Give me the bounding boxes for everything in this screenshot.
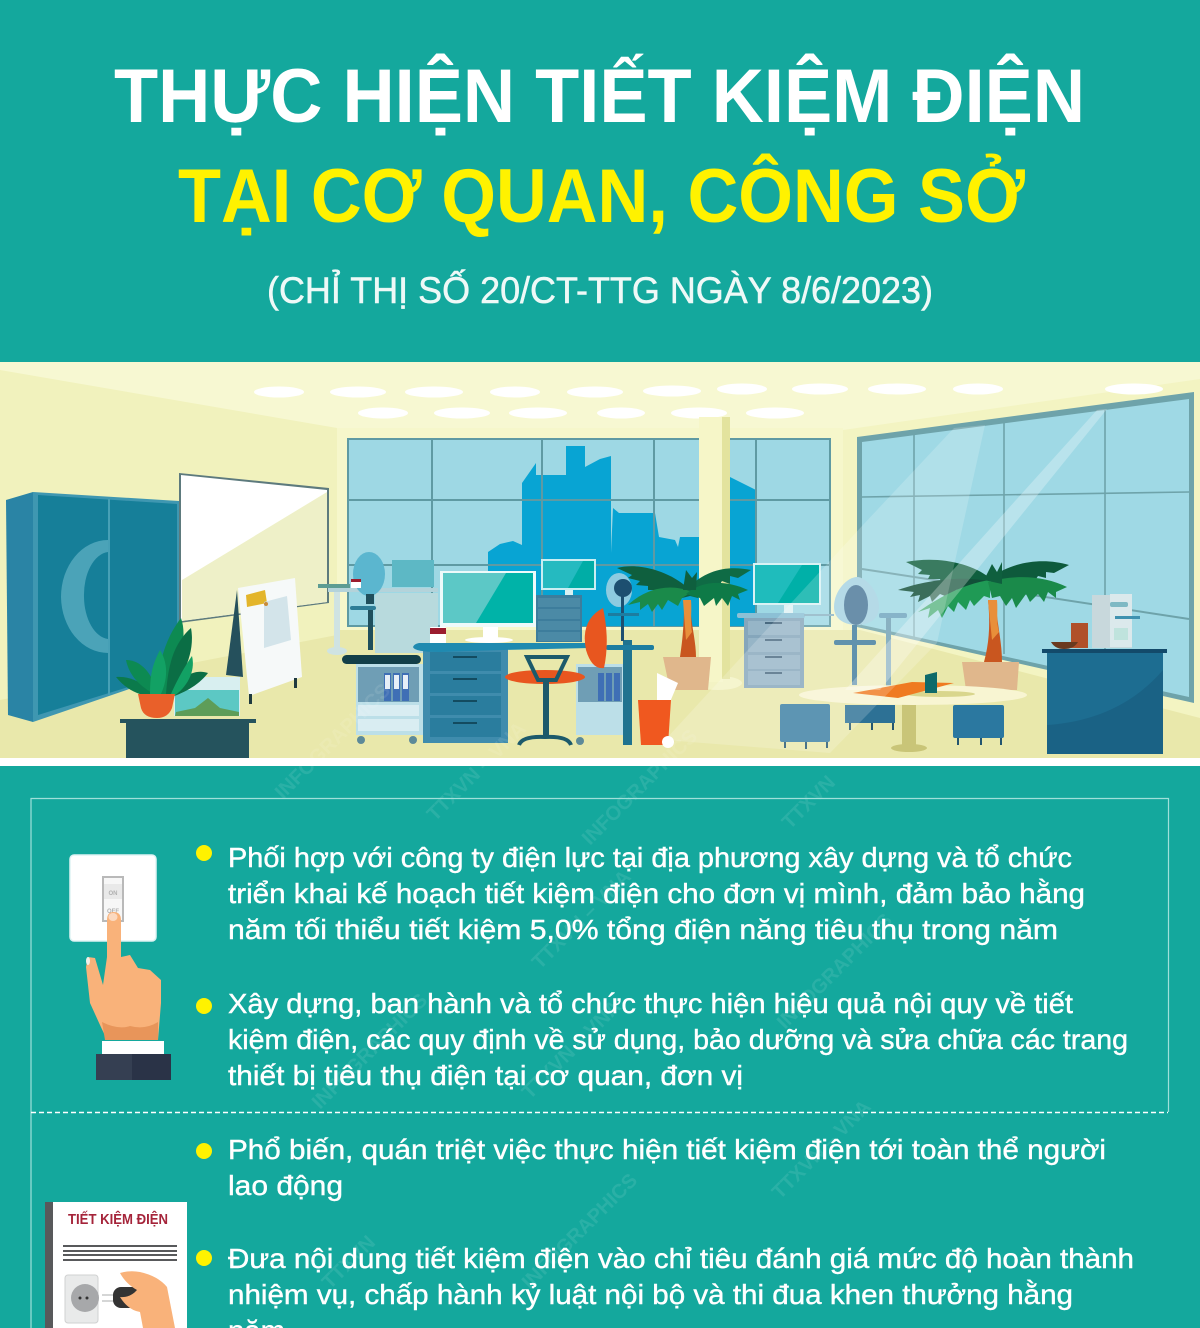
watermarks: INFOGRAPHICS (518, 1170, 642, 1294)
watermarks: INFOGRAPHICS (773, 910, 897, 1034)
flipchart (226, 578, 302, 704)
bullet list: group 2: Phổ biến, quán triệt việc thực hiện tiết kiệm điện tới toàn thể người (228, 1134, 1106, 1165)
bullet list: group 1: Phối hợp với công ty điện lực tại địa phương xây dựng và tổ chức (228, 842, 1072, 873)
column (694, 417, 742, 690)
bullet list: group 1 (196, 842, 1128, 1091)
watermarks: TTXVN – VNA (518, 996, 625, 1104)
watermarks: INFOGRAPHICS (578, 726, 702, 850)
bullet list: group 2: Đưa nội dung tiết kiệm điện vào chỉ tiêu đánh giá mức độ hoàn thành (228, 1243, 1134, 1274)
watermarks (271, 680, 897, 1294)
watermarks: TTXVN – VNA (768, 1096, 875, 1204)
swivel chair right (804, 577, 907, 686)
right drawer cart (576, 640, 654, 745)
sunlight streaks (665, 409, 1107, 753)
icon: hand pressing switch: ON (108, 891, 118, 897)
side table (120, 719, 256, 758)
wardrobe (6, 492, 179, 722)
main desk (413, 643, 590, 743)
icon: hand pressing switch (70, 855, 171, 1080)
fish tank (174, 677, 240, 716)
whiteboard (179, 473, 329, 623)
bullet list: group 1: kiệm điện, các quy định về sử dụng, bảo dưỡng và sửa chữa các trang (228, 1024, 1128, 1055)
icon: saving-electricity document (45, 1202, 187, 1328)
bullet list: group 2: lao động (228, 1170, 343, 1201)
content frame (31, 798, 1168, 1328)
red office chair (505, 608, 607, 745)
watermarks: TTXVN – VNA (423, 718, 530, 826)
watermarks: INFOGRAPHICS (271, 680, 395, 804)
watermarks: TTXVN (318, 1232, 380, 1294)
plant (116, 618, 208, 718)
watermarks: TTXVN (778, 772, 840, 834)
dashed divider (31, 1112, 1168, 1114)
title: THỰC HIỆN TIẾT KIỆM ĐIỆN (114, 53, 1085, 139)
main monitor (430, 571, 536, 645)
title: TẠI CƠ QUAN, CÔNG SỞ (178, 154, 1025, 239)
watermarks: TTXVN – VNA (528, 866, 635, 974)
office illustration (0, 362, 1200, 766)
palm tree left (617, 566, 751, 690)
counter with coffee machine (1042, 594, 1167, 754)
bullet list: group 1: năm tối thiểu tiết kiệm 5,0% tổng điện năng tiêu thụ trong năm (228, 914, 1058, 945)
icon: saving-electricity document: TIẾT KIỆM ĐIỆN (68, 1210, 168, 1228)
back window with skyline (347, 438, 831, 627)
bullet list: group 1: Xây dựng, ban hành và tổ chức thực hiện hiệu quả nội quy về tiết (228, 988, 1073, 1019)
bullet list: group 1: triển khai kế hoạch tiết kiệm điện cho đơn vị mình, đảm bảo hằng (228, 878, 1085, 909)
round table (799, 672, 1027, 752)
waste bin (638, 673, 678, 748)
title (114, 53, 1085, 239)
left drawer cart (342, 655, 423, 744)
small monitor and cabinet (536, 559, 596, 642)
ceiling lights (254, 384, 1163, 418)
right window (857, 392, 1194, 703)
fan and back chair (606, 573, 639, 641)
bullet list: group 2: nhiệm vụ, chấp hành kỷ luật nội bộ và thi đua khen thưởng hằng (228, 1279, 1073, 1310)
watermarks: INFOGRAPHICS (308, 990, 432, 1114)
right desk with monitor (737, 563, 821, 688)
subtitle: (CHỈ THỊ SỐ 20/CT-TTG NGÀY 8/6/2023) (267, 269, 933, 311)
icon: hand pressing switch: OFF (107, 909, 119, 915)
bullet list: group 1: thiết bị tiêu thụ điện tại cơ quan, đơn vị (228, 1060, 743, 1091)
stools (780, 704, 1004, 749)
bullet list: group 2 (196, 1134, 1134, 1328)
back desk (318, 552, 438, 655)
palm tree right (898, 560, 1069, 690)
